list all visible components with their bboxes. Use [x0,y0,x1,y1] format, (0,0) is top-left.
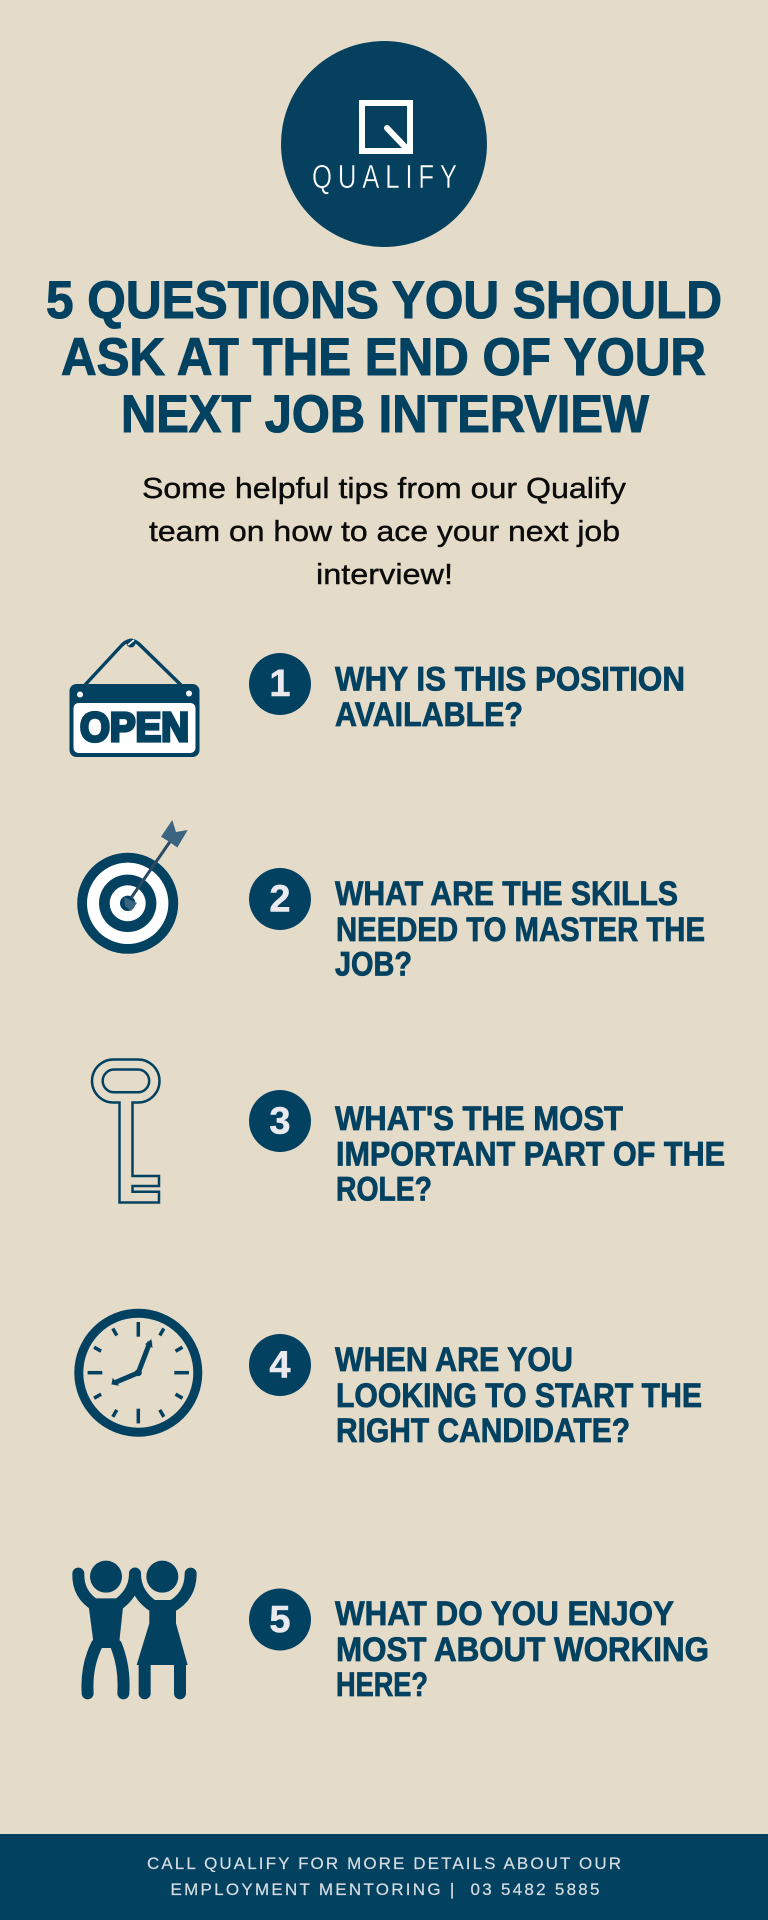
item 5 number: 5 [269,1599,291,1641]
icon: open sign [70,638,200,757]
item 3 number [249,1090,311,1152]
item 2 number: 2 [269,878,291,920]
item 3 question [335,1100,725,1208]
icon: target with arrow [77,820,188,954]
title: NEXT JOB INTERVIEW [121,385,649,444]
item 4 question [335,1341,702,1450]
item 2 question: WHAT ARE THE SKILLS [335,875,678,913]
logo badge [281,41,487,247]
item 2 question: NEEDED TO MASTER THE [336,911,705,949]
item 1 number [249,653,311,715]
item 3 question: IMPORTANT PART OF THE [336,1136,725,1174]
icon: open sign: OPEN [80,704,189,750]
item 3 number: 3 [269,1100,291,1142]
item 2 question: JOB? [335,946,412,984]
item 4 question: LOOKING TO START THE [336,1377,702,1415]
intro text: Some helpful tips from our Qualify [142,473,627,505]
item 4 number: 4 [269,1344,291,1386]
logo badge: QUALIFY [312,159,457,196]
item 1 question: AVAILABLE? [335,696,523,734]
item 5 number [249,1588,311,1650]
item 5 question [335,1595,709,1704]
intro text: team on how to ace your next job [149,516,620,548]
item 4 number [249,1334,311,1396]
item 2 question [335,875,705,984]
item 4 question: WHEN ARE YOU [335,1341,573,1379]
footer bar [0,1834,768,1920]
intro text [142,473,627,591]
item 1 question: WHY IS THIS POSITION [335,660,685,698]
item 3 question: WHAT'S THE MOST [335,1100,623,1138]
title: ASK AT THE END OF YOUR [61,328,706,387]
item 5 question: MOST ABOUT WORKING [336,1631,709,1669]
intro text: interview! [316,559,453,591]
title [46,271,722,444]
footer bar: CALL QUALIFY FOR MORE DETAILS ABOUT OUR [147,1854,621,1873]
title: 5 QUESTIONS YOU SHOULD [46,271,722,330]
icon: clock [79,1313,198,1432]
item 4 question: RIGHT CANDIDATE? [336,1412,630,1450]
item 2 number [249,868,311,930]
item 5 question: HERE? [336,1666,428,1704]
icon: key [92,1060,160,1202]
footer bar: EMPLOYMENT MENTORING | 03 5482 5885 [170,1880,600,1899]
icon: two people cheering [78,1557,191,1693]
item 5 question: WHAT DO YOU ENJOY [335,1595,674,1633]
item 1 question [335,660,685,734]
item 3 question: ROLE? [336,1170,432,1208]
item 1 number: 1 [269,663,291,705]
